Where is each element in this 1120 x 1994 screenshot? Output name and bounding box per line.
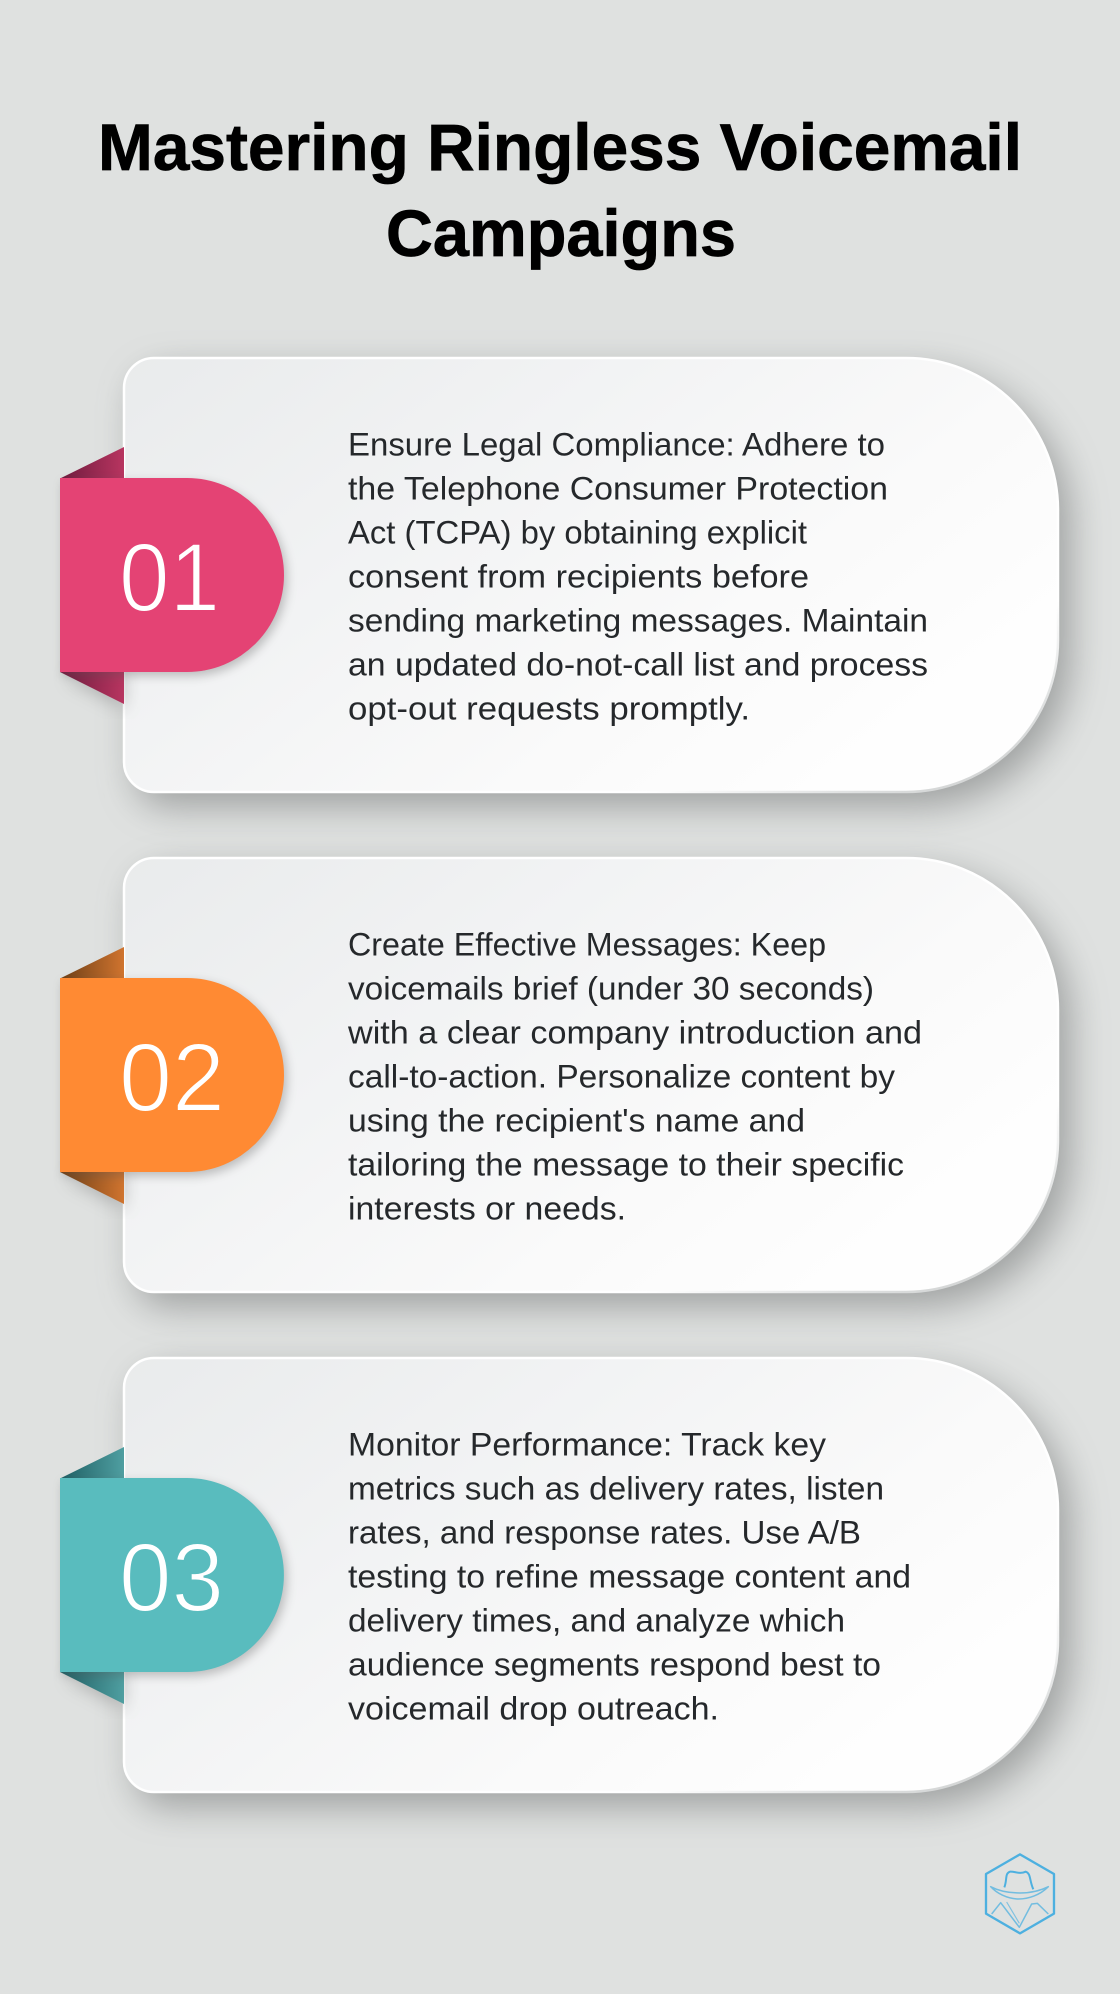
panel: step 01 legal compliance [60,358,1070,806]
ribbon folds 01 [60,447,124,708]
title: Campaigns [386,196,736,270]
text block 01: Act (TCPA) by obtaining explicit [348,514,807,550]
text block 03: testing to refine message content and [348,1558,911,1594]
text block 02: interests or needs. [348,1190,626,1226]
text block 03: audience segments respond best to [348,1646,881,1682]
text block 01: consent from recipients before [348,558,809,594]
text block 03: delivery times, and analyze which [348,1602,845,1638]
panel: step 02 effective messages [60,858,1070,1306]
text block 02: tailoring the message to their specific [348,1146,904,1182]
ribbon folds 02 [60,947,124,1208]
text block 03: rates, and response rates. Use A/B [348,1514,861,1550]
text block 02: using the recipient's name and [348,1102,805,1138]
number badge 03: 03 [119,1523,224,1632]
number badge 02 [60,978,287,1176]
text block 03 [348,1426,911,1726]
text block 02: voicemails brief (under 30 seconds) [348,970,874,1006]
text block 03: voicemail drop outreach. [348,1690,719,1726]
number badge 02: 02 [119,1023,225,1132]
title: Mastering Ringless Voicemail [98,110,1022,184]
text block 01 [348,426,928,726]
text block 01: an updated do-not-call list and process [348,646,928,682]
card body 03 [124,1358,1058,1792]
text block 01: sending marketing messages. Maintain [348,602,928,638]
text block 03: Monitor Performance: Track key [348,1426,826,1462]
card body 01 [124,358,1058,792]
text block 02: Create Effective Messages: Keep [348,926,826,962]
text block 02 [347,926,922,1226]
number badge 01 [60,478,287,676]
ribbon folds 03 [60,1447,124,1708]
text block 01: opt-out requests promptly. [348,690,750,726]
icon: hexagon logo with hat [986,1854,1054,1933]
panel: step 03 monitor performance [60,1358,1070,1806]
text block 03: metrics such as delivery rates, listen [348,1470,884,1506]
text block 02: with a clear company introduction and [347,1014,922,1050]
number badge 03 [60,1478,287,1676]
number badge 01: 01 [119,523,220,632]
text block 01: the Telephone Consumer Protection [348,470,888,506]
text block 01: Ensure Legal Compliance: Adhere to [348,426,885,462]
text block 02: call-to-action. Personalize content by [348,1058,895,1094]
title [98,110,1022,270]
card body 02 [124,858,1058,1292]
